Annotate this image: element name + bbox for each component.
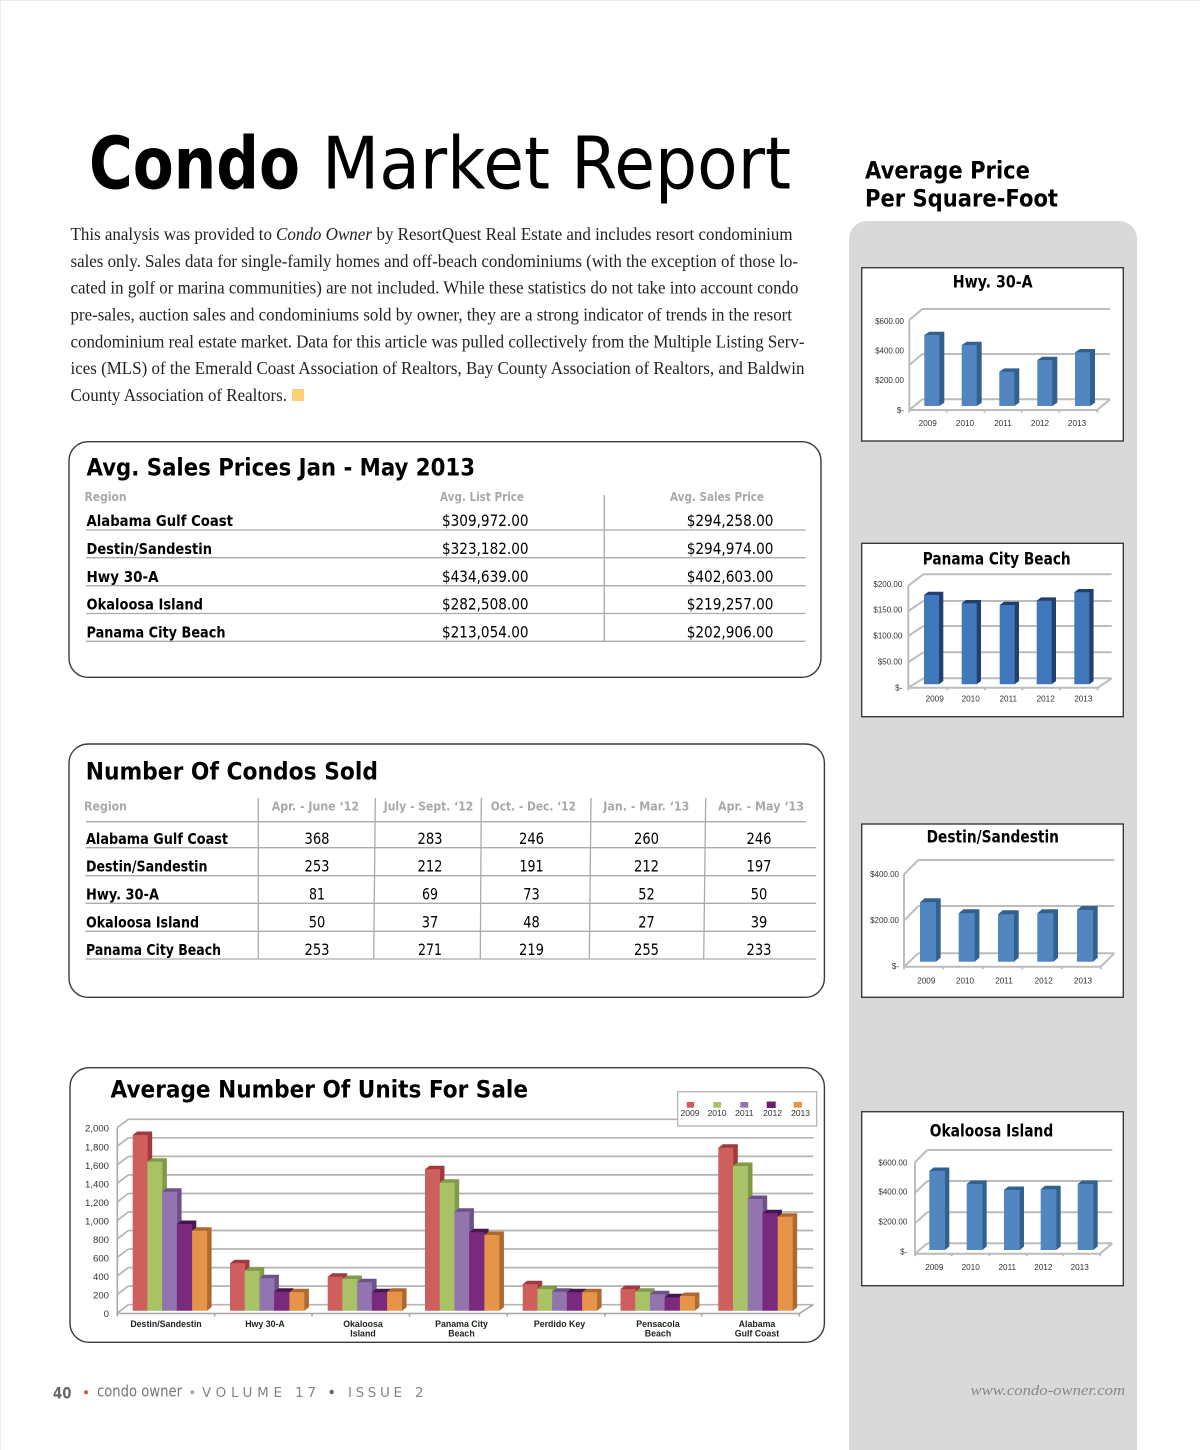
chart: Hwy. 30-A: [862, 268, 1123, 441]
row: Alabama Gulf Coast: 246: [746, 829, 772, 848]
chart: Destin/Sandestin: 2011: [995, 976, 1013, 985]
heading: number of condos sold: Number Of Condos Sold: [86, 757, 378, 785]
intro text block: ices (MLS) of the Emerald Coast Association of Realtors, Bay County Association of Realtors, and Baldwin: [70, 358, 804, 379]
table header row: [84, 799, 804, 814]
heading: avg. sales prices: Avg. Sales Prices Jan - May 2013: [86, 454, 475, 482]
y axis labels: 1,600: [85, 1161, 109, 1172]
y axis labels: 800: [93, 1235, 109, 1246]
chart: Panama City Beach: [862, 543, 1123, 717]
intro text block: by ResortQuest Real Estate and includes resort condominium: [376, 224, 792, 244]
chart: Okaloosa Island: 2010: [962, 1263, 980, 1272]
row: Alabama Gulf Coast: $294,258.00: [687, 511, 774, 530]
chart: Okaloosa Island: $600.00: [878, 1158, 908, 1167]
chart: Okaloosa Island: 2011: [998, 1263, 1017, 1272]
bars: Okaloosa Island: [328, 1273, 407, 1311]
intro text block: sales only. Sales data for single-family homes and off-beach condominiums (with the exception of those lo-: [70, 251, 798, 272]
chart: Okaloosa Island: 2009: [925, 1263, 944, 1272]
chart: Hwy. 30-A: $200.00: [875, 376, 905, 385]
chart: Destin/Sandestin: 2012: [1035, 976, 1053, 985]
row: Destin/Sandestin: Destin/Sandestin: [86, 540, 212, 558]
row: Destin/Sandestin: $294,974.00: [687, 539, 774, 558]
sidebar heading: average price per square-foot: Average Price: [865, 156, 1030, 184]
bars: Destin/Sandestin: [133, 1132, 212, 1311]
panel: avg. sales prices table: [69, 442, 821, 677]
y axis labels: 0: [104, 1309, 109, 1320]
chart: Panama City Beach: $200.00: [873, 580, 903, 589]
row: Hwy. 30-A: 81: [309, 884, 325, 903]
chart: Destin/Sandestin: $-: [892, 962, 899, 971]
category labels: Destin/Sandestin: [130, 1319, 202, 1329]
table header row: Jan. - Mar. ‘13: [602, 799, 689, 814]
footer: page number and issue line: condo owner: [97, 1382, 182, 1401]
table header row: [84, 489, 764, 504]
legend: [678, 1092, 817, 1126]
chart: Panama City Beach: $-: [895, 684, 903, 693]
category labels: Alabama: [739, 1319, 775, 1329]
footer: page number and issue line: [53, 1382, 424, 1402]
row: Panama City Beach: 253: [304, 940, 330, 959]
row: Panama City Beach: [86, 940, 772, 959]
chart: Panama City Beach: $100.00: [873, 632, 903, 641]
y axis labels: 200: [93, 1291, 109, 1302]
legend: 2012: [763, 1108, 782, 1118]
row: Okaloosa Island: Okaloosa Island: [86, 596, 203, 614]
row: Destin/Sandestin: $323,182.00: [442, 539, 528, 558]
row: Panama City Beach: $202,906.00: [687, 623, 774, 642]
chart: Okaloosa Island: $200.00: [878, 1217, 908, 1226]
y axis labels: 1,000: [85, 1217, 109, 1228]
chart: Hwy. 30-A: 2009: [919, 419, 937, 428]
chart: Okaloosa Island: 2012: [1034, 1263, 1053, 1272]
chart: Hwy. 30-A: 2012: [1031, 419, 1050, 428]
chart: Destin/Sandestin: 2013: [1074, 976, 1093, 985]
row: Hwy 30-A: Hwy 30-A: [86, 568, 158, 586]
intro text block: Condo Owner: [276, 224, 373, 244]
category labels: Beach: [645, 1328, 671, 1338]
category labels: Gulf Coast: [735, 1328, 779, 1338]
chart: Hwy. 30-A: 2013: [1068, 419, 1087, 428]
chart: Hwy. 30-A: 2010: [956, 419, 975, 428]
row: Hwy. 30-A: Hwy. 30-A: [86, 885, 159, 903]
row: Destin/Sandestin: [86, 539, 774, 558]
chart: Panama City Beach: 2011: [999, 695, 1018, 704]
legend: 2009: [680, 1108, 700, 1118]
title: Market Report: [322, 121, 791, 205]
row: Panama City Beach: Panama City Beach: [86, 624, 226, 642]
chart: Okaloosa Island: 2013: [1071, 1263, 1089, 1272]
panel: average number of units for sale: [70, 1068, 824, 1342]
intro text block: [70, 224, 804, 405]
intro text block: County Association of Realtors.: [70, 385, 287, 405]
chart: Destin/Sandestin: 2009: [917, 976, 936, 985]
category labels: Panama City: [435, 1319, 488, 1329]
table header row: Avg. Sales Price: [670, 489, 764, 504]
category labels: Island: [350, 1328, 376, 1338]
chart: Panama City Beach: 2012: [1037, 695, 1055, 704]
sidebar heading: average price per square-foot: [865, 156, 1058, 212]
chart: Okaloosa Island: $-: [900, 1248, 908, 1257]
chart: Destin/Sandestin: $400.00: [870, 870, 900, 879]
legend: 2010: [707, 1108, 727, 1118]
row: Alabama Gulf Coast: 368: [304, 829, 330, 848]
category labels: Beach: [448, 1328, 475, 1338]
panel: number of condos sold table: [69, 744, 824, 997]
row: Panama City Beach: $213,054.00: [442, 623, 528, 642]
intro text block: pre-sales, auction sales and condominiums sold by owner, they are a strong indicator of trends in the resort: [70, 304, 792, 324]
chart: Panama City Beach: 2010: [962, 695, 980, 704]
bars: Hwy 30-A: [230, 1260, 309, 1311]
row: Okaloosa Island: [86, 595, 774, 614]
footer: page number and issue line: 2: [415, 1385, 424, 1401]
chart: Destin/Sandestin: $200.00: [870, 916, 900, 925]
row: Alabama Gulf Coast: 246: [519, 829, 544, 848]
row: Hwy. 30-A: 69: [422, 884, 438, 903]
row: Okaloosa Island: 27: [638, 912, 655, 931]
legend: 2011: [735, 1108, 754, 1118]
chart: Panama City Beach: Panama City Beach: [923, 549, 1071, 568]
bars: Perdido Key: [523, 1281, 602, 1311]
table header row: July - Sept. ‘12: [383, 799, 473, 814]
row: Alabama Gulf Coast: Alabama Gulf Coast: [86, 830, 228, 848]
chart: Okaloosa Island: Okaloosa Island: [930, 1122, 1053, 1141]
row: Okaloosa Island: Okaloosa Island: [86, 913, 199, 931]
intro text block: cated in golf or marina communities) are not included. While these statistics do not take into account condo: [70, 278, 798, 299]
row: Hwy 30-A: $434,639.00: [442, 567, 528, 586]
row: Destin/Sandestin: [86, 857, 772, 876]
y axis labels: 2,000: [85, 1124, 109, 1134]
row: Alabama Gulf Coast: 283: [418, 829, 442, 848]
chart: Okaloosa Island: $400.00: [878, 1188, 908, 1197]
chart: Hwy. 30-A: $-: [897, 406, 904, 415]
row: Alabama Gulf Coast: [86, 829, 772, 848]
row: Destin/Sandestin: 253: [304, 857, 330, 876]
row: Alabama Gulf Coast: [86, 511, 774, 530]
intro text block: This analysis was provided to: [70, 224, 272, 244]
row: Destin/Sandestin: 191: [520, 857, 544, 876]
table header row: Oct. - Dec. ‘12: [491, 799, 576, 814]
chart: Okaloosa Island: [862, 1112, 1123, 1286]
category labels: Okaloosa: [343, 1319, 383, 1329]
footer: page number and issue line: 17: [295, 1385, 316, 1401]
title: [89, 121, 791, 205]
table header row: Region: [84, 489, 126, 504]
title: Condo: [89, 121, 300, 205]
heading: average number of units: Average Number Of Units For Sale: [110, 1076, 528, 1104]
row: Panama City Beach: 255: [634, 940, 659, 959]
row: Panama City Beach: 271: [418, 940, 442, 959]
row: Okaloosa Island: $282,508.00: [442, 595, 528, 614]
row: Hwy 30-A: $402,603.00: [687, 567, 774, 586]
chart: Destin/Sandestin: [862, 824, 1123, 997]
row: Destin/Sandestin: 212: [418, 857, 442, 876]
row: Okaloosa Island: [86, 912, 767, 931]
chart: Panama City Beach: $150.00: [873, 606, 903, 614]
footer: page number and issue line: 40: [53, 1384, 72, 1402]
bars: Alabama Gulf Coast: [718, 1144, 797, 1311]
row: Hwy. 30-A: 52: [638, 884, 655, 903]
sidebar heading: average price per square-foot: Per Square-Foot: [865, 184, 1058, 212]
chart: Panama City Beach: 2013: [1074, 695, 1093, 704]
row: Hwy 30-A: [86, 567, 774, 586]
bar chart: units for sale: [85, 1092, 817, 1338]
y axis labels: 400: [93, 1272, 109, 1283]
category labels: Hwy 30-A: [245, 1319, 285, 1329]
row: Destin/Sandestin: 197: [746, 857, 772, 876]
row: Hwy. 30-A: 73: [523, 884, 540, 903]
footer: page number and issue line: ISSUE: [348, 1385, 402, 1401]
footer: website: www.condo-owner.com: [970, 1383, 1125, 1399]
bars: Pensacola Beach: [620, 1286, 699, 1311]
row: Panama City Beach: Panama City Beach: [86, 941, 221, 959]
row: Okaloosa Island: $219,257.00: [687, 595, 774, 614]
chart: Hwy. 30-A: $600.00: [875, 317, 905, 326]
category labels: [130, 1319, 779, 1338]
row: Panama City Beach: 219: [519, 940, 544, 959]
legend: 2013: [791, 1108, 810, 1118]
chart: Panama City Beach: 2009: [926, 695, 944, 704]
y axis labels: 1,400: [85, 1180, 109, 1190]
bars: Panama City Beach: [425, 1166, 504, 1311]
category labels: Pensacola: [636, 1319, 680, 1329]
row: Panama City Beach: 233: [746, 940, 772, 959]
panel: price per square-foot sidebar: [849, 221, 1137, 1450]
chart: Hwy. 30-A: $400.00: [875, 346, 905, 356]
y axis labels: 1,200: [85, 1198, 109, 1209]
table header row: Apr. - June ‘12: [272, 799, 359, 814]
category labels: Perdido Key: [534, 1319, 585, 1329]
row: Okaloosa Island: 37: [422, 912, 438, 931]
row: Alabama Gulf Coast: $309,972.00: [442, 511, 528, 530]
intro text block: condominium real estate market. Data for this article was pulled collectively from the Multiple Listing Serv-: [70, 332, 804, 352]
row: Destin/Sandestin: 212: [634, 857, 659, 876]
chart: Destin/Sandestin: 2010: [956, 976, 975, 985]
row: Okaloosa Island: 39: [751, 912, 767, 931]
row: Destin/Sandestin: Destin/Sandestin: [86, 858, 208, 876]
row: Okaloosa Island: 48: [523, 912, 540, 931]
y axis labels: 1,800: [85, 1142, 109, 1153]
table header row: Region: [84, 799, 127, 814]
row: Okaloosa Island: 50: [309, 912, 325, 931]
row: Panama City Beach: [86, 623, 774, 642]
chart: Hwy. 30-A: Hwy. 30-A: [953, 272, 1033, 291]
chart: Destin/Sandestin: Destin/Sandestin: [927, 827, 1059, 846]
y axis labels: 600: [93, 1254, 109, 1265]
chart: Hwy. 30-A: 2011: [994, 419, 1012, 428]
row: Alabama Gulf Coast: 260: [634, 829, 659, 848]
footer: page number and issue line: VOLUME: [202, 1385, 282, 1401]
row: Alabama Gulf Coast: Alabama Gulf Coast: [86, 512, 233, 530]
row: Hwy. 30-A: 50: [751, 884, 767, 903]
row: Hwy. 30-A: [86, 884, 767, 903]
table header row: Apr. - May ‘13: [718, 799, 804, 814]
table header row: Avg. List Price: [440, 489, 524, 504]
y axis labels: [85, 1124, 109, 1320]
chart: Panama City Beach: $50.00: [878, 658, 903, 667]
